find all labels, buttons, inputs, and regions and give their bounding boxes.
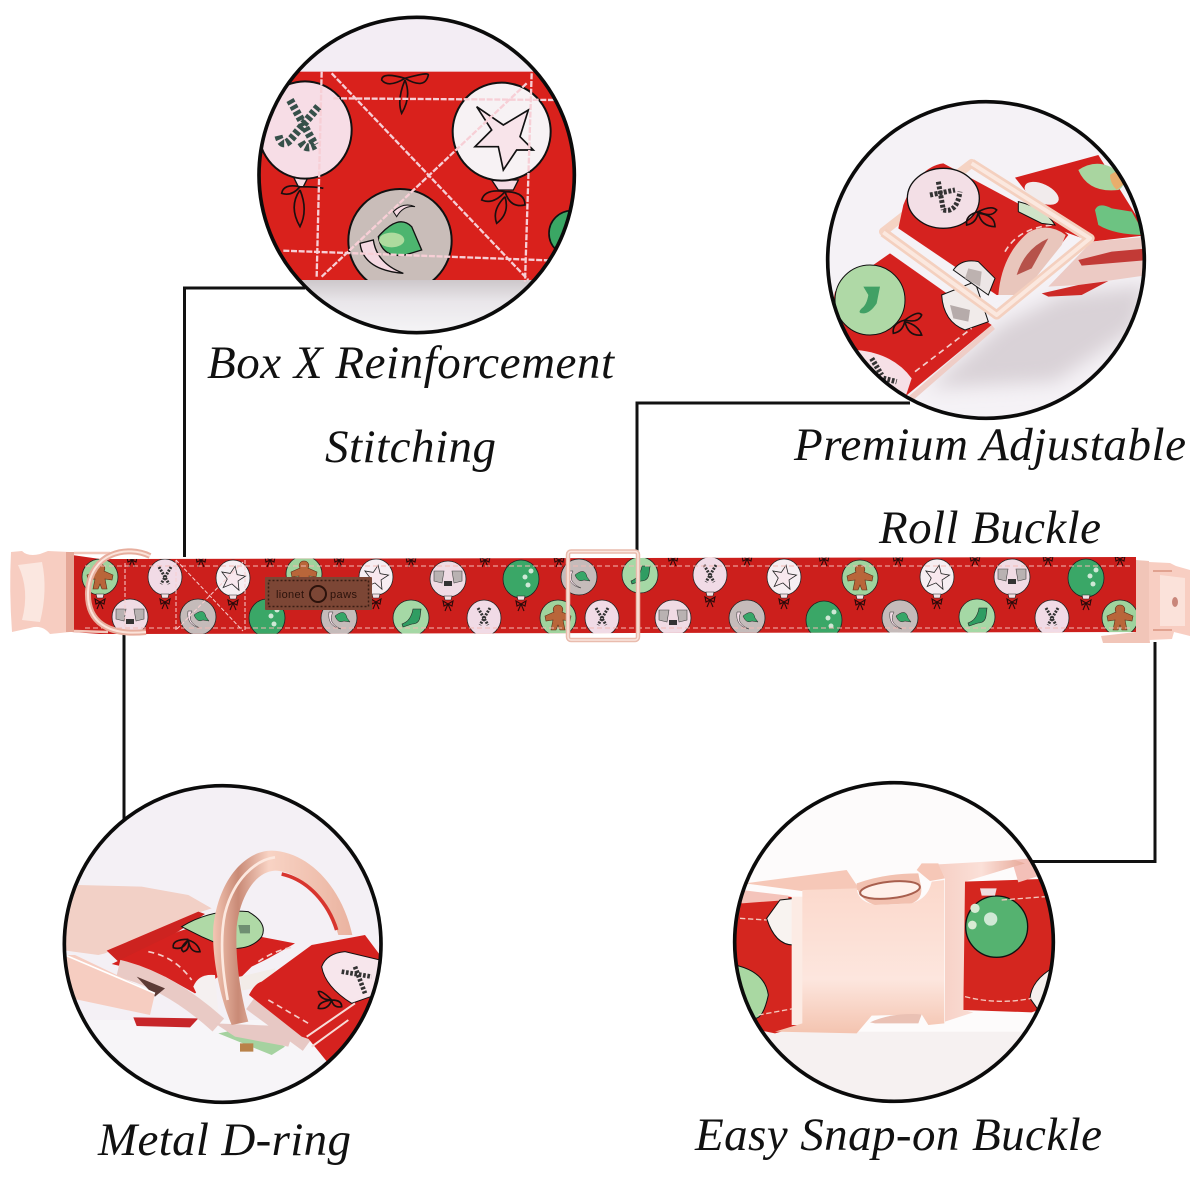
ring — [64, 786, 381, 1102]
ring — [259, 17, 574, 333]
label: Roll Buckle: Roll Buckle — [878, 502, 1101, 554]
label: Box X Reinforcement: Box X Reinforcement — [207, 337, 615, 389]
D-ring — [88, 551, 150, 633]
fabric band — [250, 72, 583, 280]
brand label: lionet — [276, 589, 304, 601]
circle: adjustable roll buckle — [826, 100, 1146, 420]
ornament: top bow — [382, 74, 428, 113]
left buckle — [10, 551, 110, 634]
label: Stitching: Stitching — [325, 421, 496, 473]
circle: metal D-ring — [55, 780, 395, 1113]
ornament: star — [453, 83, 551, 223]
right plate — [938, 860, 1025, 1022]
webbing — [118, 968, 218, 1027]
ring slot — [857, 863, 945, 1023]
right buckle — [1101, 560, 1190, 643]
circle: snap-on buckle — [725, 775, 1065, 1115]
rolled fabric — [898, 163, 1068, 295]
circle: box X stitching — [257, 16, 576, 334]
brand label — [265, 577, 372, 610]
main plate — [775, 880, 944, 1033]
ring — [828, 102, 1144, 418]
connector lines — [124, 288, 1155, 862]
ornament: candy canes — [258, 81, 352, 227]
fabric right — [963, 858, 1062, 1012]
backdrop — [66, 788, 379, 1020]
X stitching — [283, 72, 560, 282]
backdrop — [300, 19, 533, 72]
ring — [735, 783, 1053, 1101]
backdrop — [725, 775, 1065, 1115]
buckle under roll — [879, 158, 1094, 286]
fabric left — [736, 890, 797, 1034]
slider buckle — [568, 552, 638, 640]
label: Easy Snap-on Buckle: Easy Snap-on Buckle — [694, 1109, 1102, 1161]
ornament: green edge — [548, 210, 568, 249]
buckle front plate — [63, 955, 155, 1015]
buckle front bars — [883, 163, 1090, 315]
D-ring body — [213, 851, 352, 1025]
left fabric tab — [112, 910, 295, 994]
top bar — [745, 870, 858, 891]
lower webbing and print — [215, 1002, 308, 1055]
label: Metal D-ring: Metal D-ring — [97, 1114, 351, 1166]
label: Premium Adjustable: Premium Adjustable — [793, 419, 1186, 471]
right fabric tab — [249, 935, 385, 1063]
collar — [10, 551, 1190, 652]
side bar — [792, 896, 802, 1025]
lower band — [828, 253, 995, 400]
collar band with ornament print — [72, 555, 1136, 634]
red strip behind tab — [107, 912, 205, 962]
brand label: paws — [330, 589, 358, 601]
ornament: grey grinch — [348, 189, 452, 292]
backdrop — [830, 104, 1142, 416]
buckle body — [62, 885, 212, 955]
far band — [1015, 155, 1148, 297]
